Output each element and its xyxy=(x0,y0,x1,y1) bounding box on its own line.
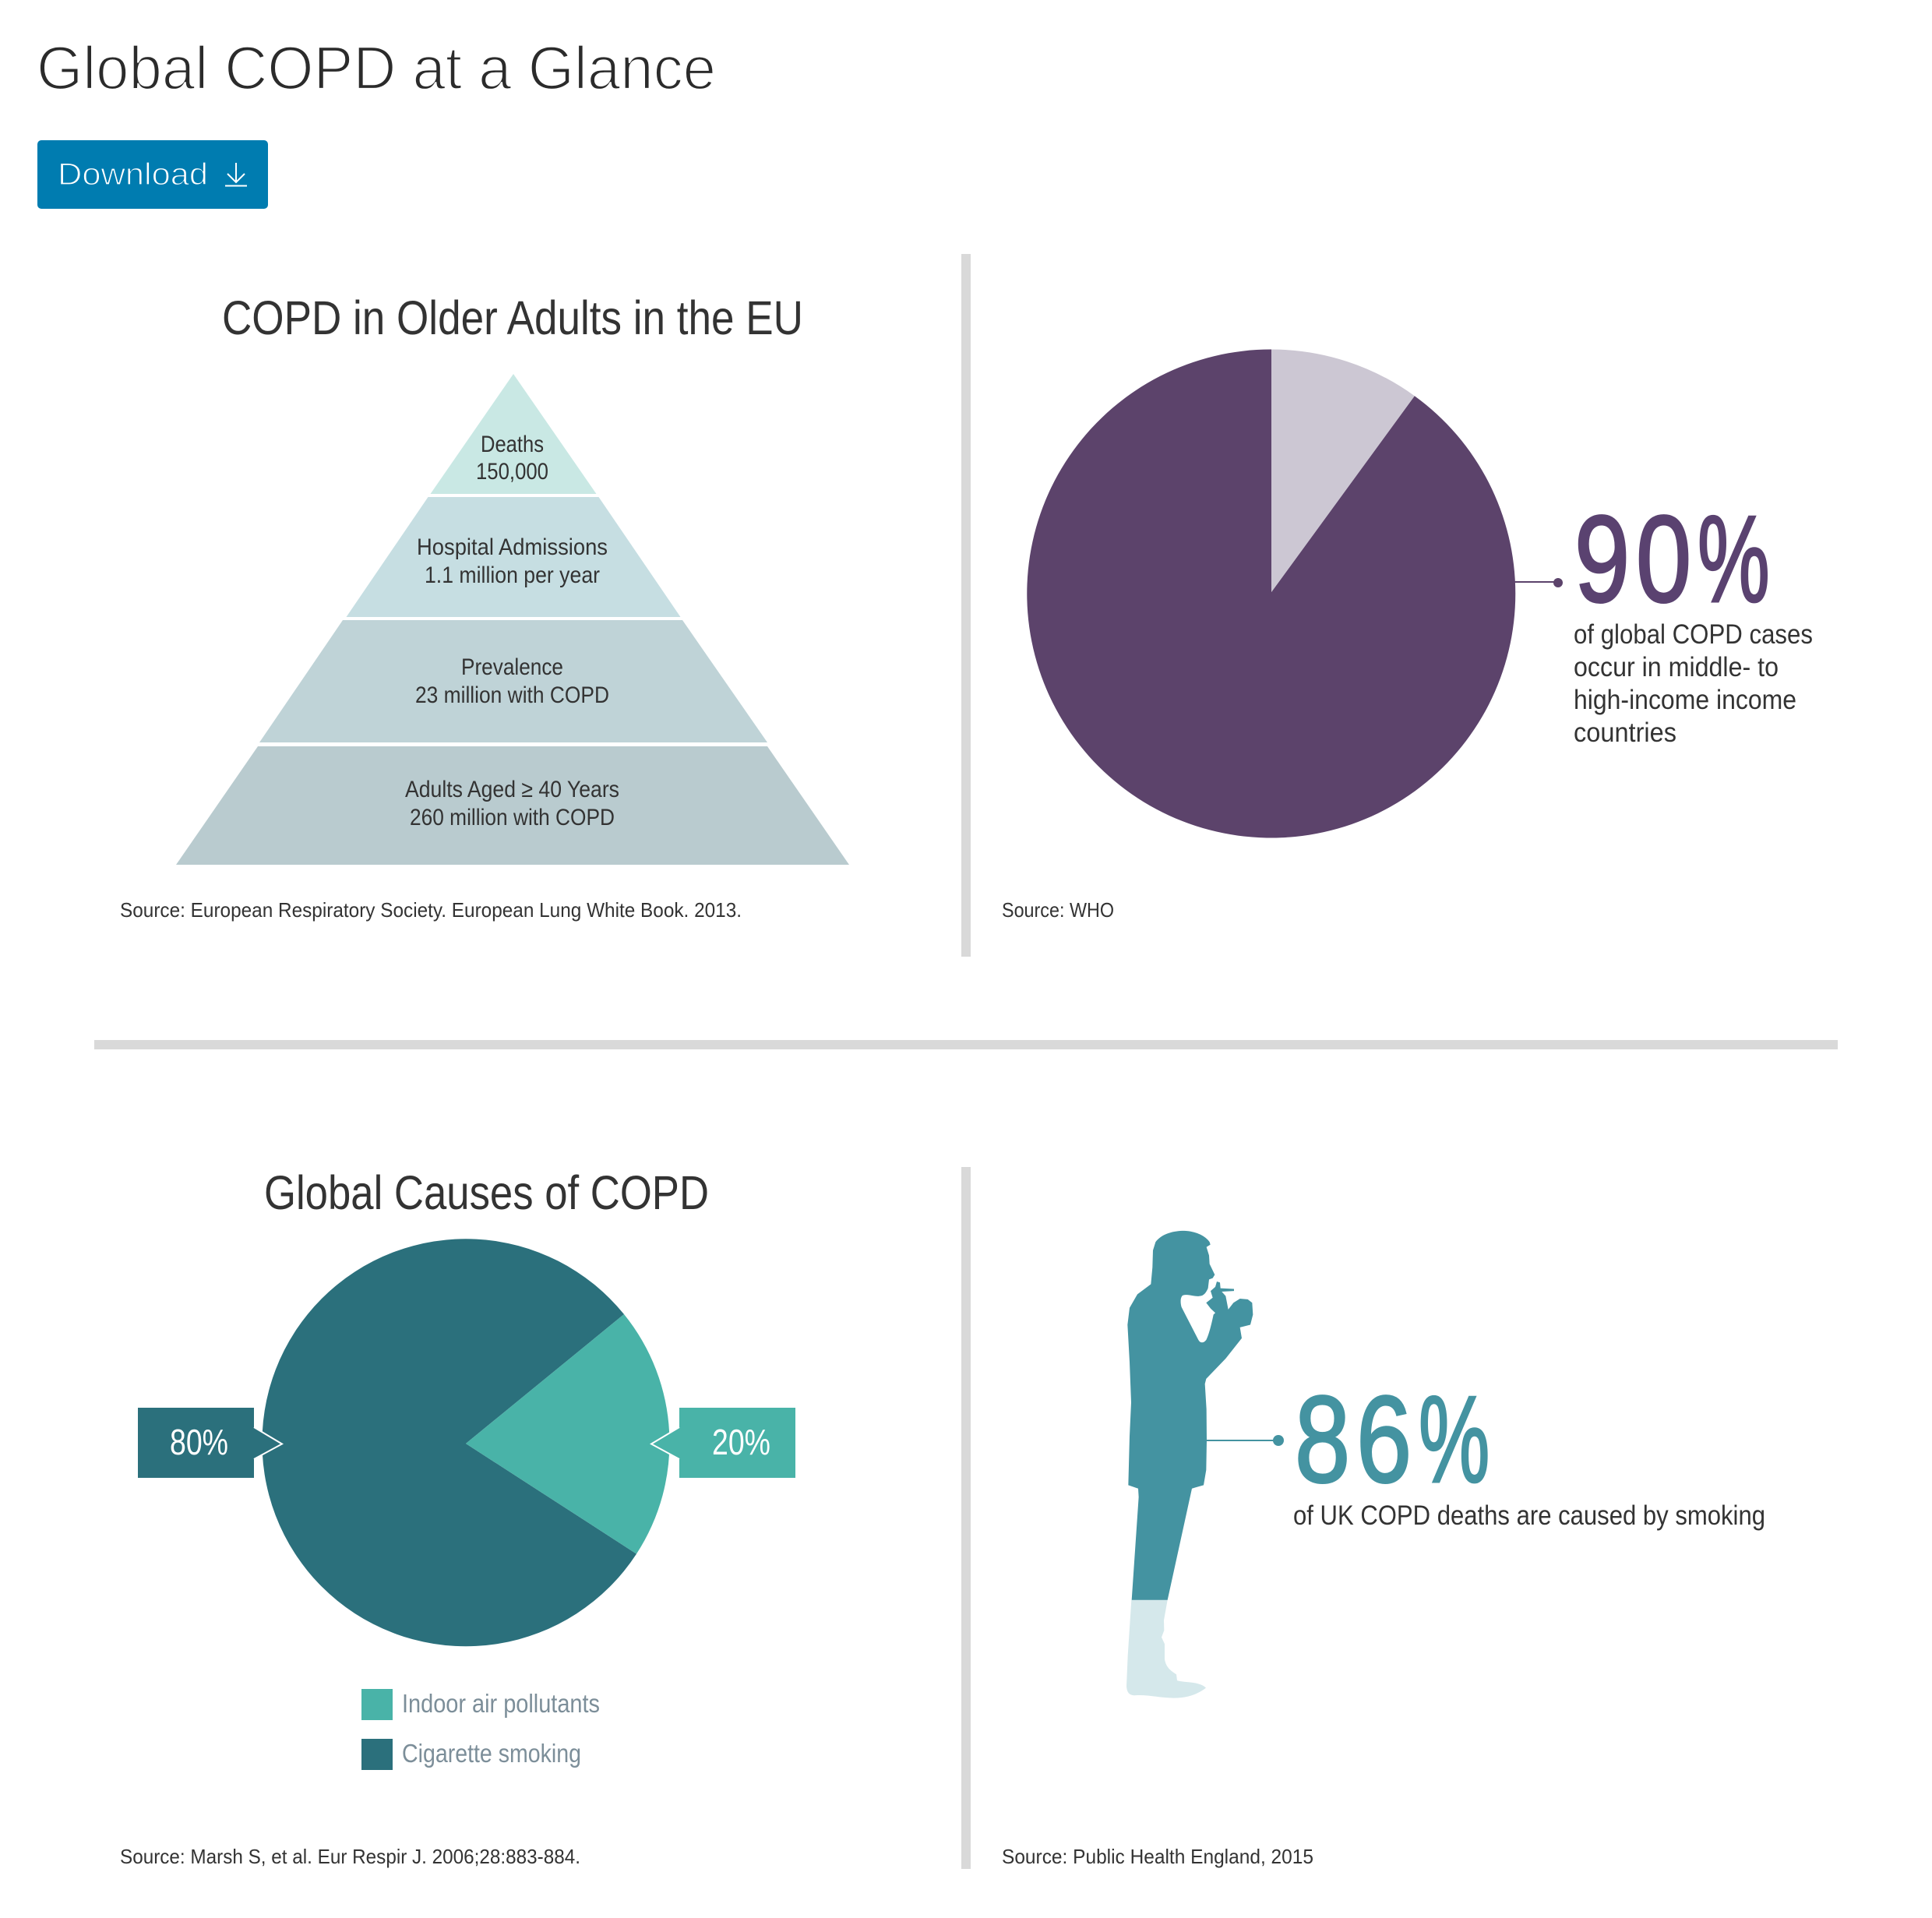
download button: Download xyxy=(58,157,208,192)
pie chart: causes xyxy=(262,1239,669,1646)
pyramid tier: prevalence: 23 million with COPD xyxy=(415,682,609,708)
statistic: 86%: % xyxy=(1419,1371,1490,1508)
legend: Cigarette smoking xyxy=(402,1739,581,1768)
panel: 86% of UK deaths xyxy=(1002,1231,1765,1868)
legend: Indoor air pollutants xyxy=(402,1689,600,1718)
download button xyxy=(37,140,268,209)
pyramid tier: hospital admissions xyxy=(346,497,681,617)
source: WHO: Source: WHO xyxy=(1002,898,1114,922)
title: Global COPD at a Glance xyxy=(37,33,716,102)
source: Public Health England: Source: Public Health England, 2015 xyxy=(1002,1845,1313,1868)
statistic: 86% xyxy=(1295,1371,1490,1508)
callout: 80%: 80% xyxy=(170,1422,228,1462)
pie chart: 90 percent xyxy=(1027,349,1515,837)
source: European Lung White Book: Source: European Respiratory Society. European Lung White Book. 2013. xyxy=(120,898,742,922)
pyramid tier: hospital admissions: 1.1 million per year xyxy=(425,562,600,588)
statistic: 86%: 86 xyxy=(1295,1371,1412,1508)
panel: 90% of global cases xyxy=(1002,349,1813,922)
heading: COPD in Older Adults in the EU: COPD in Older Adults in the EU xyxy=(222,291,803,344)
pyramid tier: prevalence xyxy=(259,620,767,742)
statistic: 90% xyxy=(1574,491,1770,628)
panel: global causes of COPD xyxy=(120,1166,795,1868)
heading: Global Causes of COPD: Global Causes of COPD xyxy=(264,1166,709,1219)
pyramid chart xyxy=(176,374,849,865)
pyramid tier: adults aged 40 and over: 260 million with COPD xyxy=(410,805,615,830)
description: global cases: occur in middle- to xyxy=(1574,652,1779,682)
pyramid tier: prevalence: Prevalence xyxy=(461,654,563,680)
statistic: 90%: 90 xyxy=(1574,491,1691,628)
pyramid tier: deaths: 150,000 xyxy=(476,459,548,485)
pyramid tier: adults aged 40 and over xyxy=(176,746,849,865)
pyramid tier: deaths: Deaths xyxy=(481,432,544,457)
connector line and dot xyxy=(1514,578,1563,587)
callout: 20% xyxy=(651,1408,795,1478)
pyramid tier: deaths xyxy=(430,374,597,494)
legend xyxy=(361,1689,600,1770)
callout: 80% xyxy=(138,1408,282,1478)
panel: COPD in older adults xyxy=(120,291,849,922)
description: global cases xyxy=(1574,619,1813,748)
description: global cases: of global COPD cases xyxy=(1574,619,1813,650)
pyramid tier: hospital admissions: Hospital Admissions xyxy=(417,534,608,560)
description: global cases: high-income income xyxy=(1574,685,1796,715)
description: UK deaths: of UK COPD deaths are caused by smoking xyxy=(1293,1500,1765,1531)
callout: 20%: 20% xyxy=(712,1422,770,1462)
connector line and dot xyxy=(1207,1435,1284,1446)
statistic: 90%: % xyxy=(1698,491,1770,628)
pyramid tier: adults aged 40 and over: Adults Aged ≥ 40 Years xyxy=(405,777,619,802)
source: Marsh et al: Source: Marsh S, et al. Eur Respir J. 2006;28:883-884. xyxy=(120,1845,580,1868)
icon: smoking man silhouette xyxy=(1126,1231,1253,1698)
description: global cases: countries xyxy=(1574,717,1676,748)
